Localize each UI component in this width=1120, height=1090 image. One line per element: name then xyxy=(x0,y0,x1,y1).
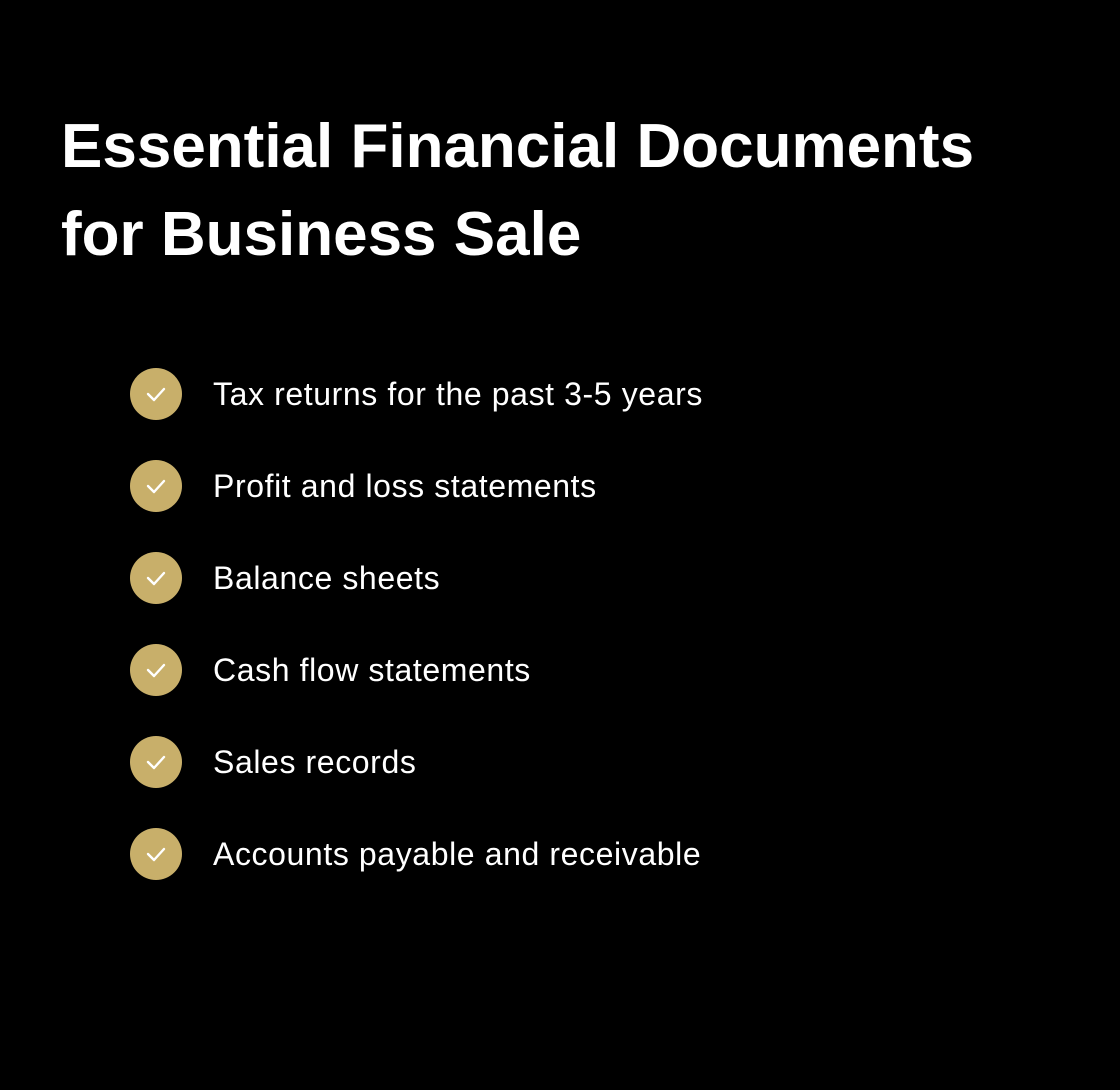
item: tax returns: Tax returns for the past 3-5 years xyxy=(213,376,703,412)
item: accounts: Accounts payable and receivable xyxy=(213,836,701,872)
item: cash flow: Cash flow statements xyxy=(213,652,531,688)
title: Essential Financial Documents xyxy=(61,112,974,181)
title xyxy=(61,112,974,269)
item: balance sheets: Balance sheets xyxy=(213,560,440,596)
checklist xyxy=(130,368,703,880)
item: profit and loss xyxy=(130,460,597,512)
item: sales records: Sales records xyxy=(213,744,416,780)
item: accounts xyxy=(130,828,701,880)
title: for Business Sale xyxy=(61,200,581,269)
item: tax returns xyxy=(130,368,703,420)
item: cash flow xyxy=(130,644,531,696)
item: profit and loss: Profit and loss statements xyxy=(213,468,597,504)
item: balance sheets xyxy=(130,552,440,604)
item: sales records xyxy=(130,736,416,788)
